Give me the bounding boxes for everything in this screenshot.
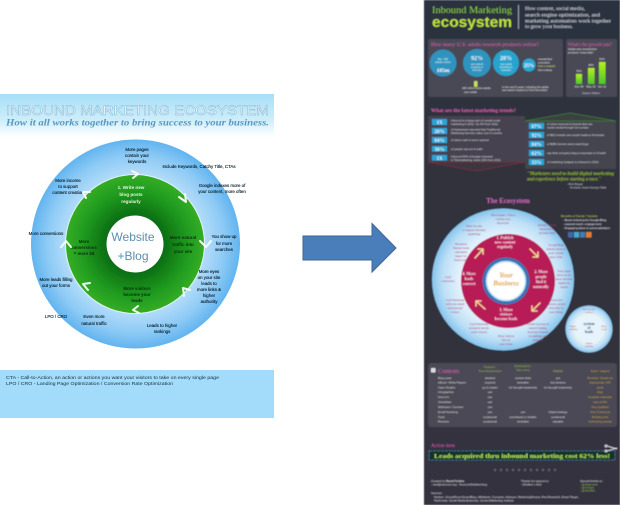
outbound stat rows: of people opt-out of calls bbox=[451, 147, 483, 151]
outer ring labels: More pages bbox=[125, 147, 149, 152]
outer ring labels: more often bbox=[549, 255, 563, 259]
side note: this is likely bbox=[538, 68, 553, 72]
section heading: latest marketing trends: What are the latest marketing trends? bbox=[431, 108, 516, 114]
outer ring labels: viewers, people bbox=[547, 302, 566, 307]
footnotes: use mobile bbox=[464, 90, 478, 94]
inbound stat rows bbox=[529, 122, 606, 166]
footnotes bbox=[462, 85, 549, 94]
funnel of leads disc: More bbox=[601, 325, 608, 328]
outer ring labels: higher in bbox=[559, 281, 570, 285]
footer credits: - Distilled + Moz bbox=[521, 482, 542, 486]
funnel of leads disc: of bbox=[587, 326, 591, 330]
panel: contents comparison table: for thought leadership bbox=[544, 386, 572, 390]
panel: growth chart bbox=[566, 39, 617, 97]
your business center bbox=[486, 262, 526, 300]
table column headers: Nimbly bbox=[553, 369, 563, 373]
panel: contents comparison table: Prioritize: Simple as bbox=[587, 376, 613, 380]
crimson ring labels: leads bbox=[465, 276, 474, 281]
stat circle: 185 million: 185m bbox=[437, 68, 450, 74]
intro text: How content, social media, bbox=[525, 7, 585, 12]
outer ring labels: leads to bbox=[201, 281, 217, 286]
panel: outbound list bbox=[428, 116, 525, 171]
panel: contents comparison table: great bbox=[597, 386, 603, 390]
right title bbox=[432, 5, 513, 31]
outer ring labels: Include Keywords, Catchy Title, CTAs bbox=[162, 164, 236, 169]
outer ring labels: includes links bbox=[539, 231, 556, 235]
panel: contents comparison table: for thought leadership bbox=[509, 386, 537, 390]
green ring labels: 1. Write new bbox=[118, 185, 145, 190]
left bottom definitions band: CTA - Call-to-Action, an action or actions you want your visitors to take on every single page bbox=[6, 375, 219, 380]
side note bbox=[538, 57, 556, 72]
icon: phone bbox=[474, 81, 478, 87]
upward green chevron bbox=[525, 113, 616, 121]
green ring labels bbox=[118, 185, 145, 204]
panel: contents comparison table: few devices bbox=[550, 380, 566, 384]
footer credits bbox=[431, 479, 603, 502]
cycle arrows bbox=[475, 249, 540, 311]
funnel of leads disc: Most people bbox=[583, 308, 596, 311]
outbound stat rows bbox=[432, 118, 502, 162]
icon: social squares bbox=[568, 232, 592, 238]
outer ring labels: Retention bbox=[455, 242, 467, 246]
green ring dark labels: More bbox=[79, 239, 90, 244]
quote: "Marketers need to build digital marketing bbox=[527, 172, 614, 177]
outer ring labels: searches bbox=[215, 247, 234, 252]
inbound stat rows: 62% bbox=[532, 152, 542, 157]
table column headers: Planned / bbox=[484, 365, 496, 369]
funnel of leads disc: connect bbox=[585, 311, 593, 314]
bar chart: 61% bbox=[599, 57, 605, 61]
intro text bbox=[525, 7, 612, 30]
outer blue ring bbox=[31, 140, 240, 348]
table title: Contents bbox=[438, 369, 460, 375]
stat circle: 28%: 28% bbox=[500, 56, 512, 62]
stat circle: 92%: 92% bbox=[471, 56, 483, 62]
inbound stat rows: social media through 1st contact bbox=[547, 126, 589, 130]
table icon bbox=[431, 368, 436, 372]
table rows: Infographics bbox=[438, 390, 454, 394]
panel: contents comparison table: occasional bbox=[551, 415, 565, 419]
right title: ecosystem bbox=[432, 14, 512, 31]
crimson ring labels: 3. More bbox=[499, 307, 513, 312]
crimson ring labels: find it bbox=[536, 279, 547, 284]
stat circle: 92% bbox=[463, 49, 491, 77]
panel: contents comparison table: ratio at 8% bbox=[593, 400, 607, 404]
dark page background bbox=[424, 0, 620, 505]
panel: contents comparison table: linked strategy bbox=[549, 410, 568, 414]
outer ring labels: your content bbox=[548, 251, 564, 255]
panel: contents comparison table: yes bbox=[488, 390, 493, 394]
outer ring labels: More visitors bbox=[498, 334, 515, 338]
inbound stat rows: say their company blog is important to Growth bbox=[547, 151, 606, 155]
table column headers bbox=[479, 364, 610, 373]
outer ring labels: on your site bbox=[198, 275, 221, 280]
outer ring labels: fill out bbox=[502, 338, 510, 342]
outer ring labels: for more bbox=[216, 241, 233, 246]
outer ring labels: to support inbound bbox=[463, 228, 486, 232]
subscribers list callout: - expand reach, engagement bbox=[563, 222, 602, 226]
funnel of leads disc bbox=[566, 306, 612, 352]
white cycle arrows bbox=[61, 171, 211, 313]
callout: leads banner: Leads acquired thru inbound marketing cost 62% less! bbox=[434, 453, 610, 460]
subscribers list callout bbox=[561, 214, 610, 238]
panel: left inbound marketing diagram bbox=[0, 94, 274, 418]
crimson ring labels: new content bbox=[495, 240, 516, 244]
subscribers list callout: Benefits of Social / Youtube bbox=[561, 214, 598, 218]
icon: scissors bbox=[605, 445, 617, 452]
panel: contents comparison table: yes bbox=[488, 395, 493, 399]
green ring dark labels: become your bbox=[123, 292, 151, 297]
bar chart bbox=[575, 57, 607, 88]
outbound stat rows: Marketing has less value over 6 months bbox=[451, 131, 502, 135]
green ring dark labels: More natural bbox=[170, 235, 196, 240]
chart heading: What's the growth rate? bbox=[568, 43, 613, 48]
outer ring labels: Nurture leads bbox=[453, 246, 470, 250]
outer ring labels: Lead bbox=[445, 275, 451, 279]
outbound stat rows: 84% bbox=[434, 139, 444, 144]
green ring dark labels: traffic into bbox=[172, 242, 194, 247]
outer ring labels: contact bbox=[451, 310, 459, 314]
outbound stat rows: 28% bbox=[434, 130, 444, 135]
green ring dark labels: your site bbox=[174, 249, 193, 254]
footnotes: use search engines to find information bbox=[502, 88, 548, 92]
crimson ring labels: 1. Publish bbox=[497, 235, 514, 240]
outer ring labels: Google/Bing bbox=[548, 243, 564, 247]
inbound stat rows: 92% bbox=[532, 134, 542, 139]
outer ring labels: more searches bbox=[555, 277, 573, 281]
green ring dark labels: conversions bbox=[71, 245, 97, 250]
outbound stat rows: marketing in 2012. Up 9% from 2011 bbox=[451, 122, 498, 126]
inbound stat rows: of marketing budgets to inbound in 2012 bbox=[547, 160, 599, 164]
panel: right ecosystem infographic bbox=[424, 0, 620, 505]
table rows: Case Studies bbox=[438, 386, 456, 390]
decorative dot row bbox=[494, 469, 556, 471]
panel: contents comparison table: desirable bbox=[517, 420, 529, 424]
outer ring labels: rankings bbox=[154, 329, 171, 334]
table rows: Checklists bbox=[438, 400, 452, 404]
panel: growth chart: products "externally": bbox=[568, 50, 594, 54]
table column headers: Distribution / bbox=[514, 364, 532, 368]
quote: President, Sensis Strategy Think bbox=[570, 186, 607, 190]
action item heading: Action item bbox=[431, 444, 455, 449]
arrow: blue right arrow bbox=[303, 224, 396, 272]
website blog center circle: +Blog bbox=[117, 249, 149, 263]
panel: contents comparison table: valuable bbox=[553, 420, 564, 424]
ecosystem blue ring bbox=[482, 258, 530, 304]
panel heading: How many U.S. adults research products online? bbox=[431, 43, 540, 48]
title divider bbox=[518, 5, 519, 29]
funnel of leads disc: Higher bbox=[586, 342, 593, 345]
ecosystem crimson ring bbox=[461, 234, 555, 328]
footer credits: Sources: bbox=[431, 491, 443, 495]
outer ring labels: click link on bbox=[548, 306, 564, 310]
outer ring labels: results bbox=[560, 285, 569, 289]
outer ring labels: marketing bbox=[468, 232, 481, 236]
green ring labels: blog posts bbox=[119, 192, 143, 197]
bar chart: May 10 bbox=[586, 84, 596, 88]
outer ring labels: More eyes bbox=[199, 269, 220, 274]
stat circle: 25%: 25% bbox=[524, 64, 534, 69]
outer ring labels: increases domain bbox=[528, 330, 549, 334]
bar chart: Dec 09 bbox=[575, 84, 584, 88]
table rows: Email Nurturing bbox=[438, 410, 458, 414]
footer credits: Thanks for support to: bbox=[521, 479, 549, 483]
outer ring labels: with your email bbox=[446, 302, 465, 306]
table rows: Tools bbox=[438, 415, 445, 419]
footer credits: - @dharmesh bbox=[580, 482, 598, 486]
outer ring labels: LPO / CRO bbox=[45, 314, 68, 319]
panel: contents comparison table: yes bbox=[521, 410, 526, 414]
stat circle: 92%: use search bbox=[471, 62, 484, 66]
outer ring labels bbox=[441, 213, 573, 346]
outbound stat rows: 1X bbox=[436, 121, 443, 126]
funnel of leads disc: visibility bbox=[569, 328, 578, 331]
ecosystem outer disc bbox=[432, 208, 574, 350]
panel: contents comparison table: go-to leader bbox=[482, 386, 498, 390]
website blog center circle bbox=[106, 216, 164, 272]
outer ring labels: Leads to higher bbox=[147, 323, 178, 328]
intro text: search engine optimization, and bbox=[525, 14, 601, 18]
table column headers: Style / shaped bbox=[591, 369, 610, 373]
left header band bbox=[0, 94, 274, 137]
inbound stat rows: of B2C brands use social media to find leads bbox=[547, 133, 605, 137]
panel: contents comparison table: desirable bbox=[517, 380, 529, 384]
outer ring labels: contain your bbox=[125, 153, 149, 158]
subscribers list callout: - Engaging place to personalization bbox=[563, 226, 610, 230]
panel: contents comparison table: content links bbox=[515, 376, 532, 380]
table rows: Webinars / Courses bbox=[438, 405, 464, 409]
your business center: Your bbox=[499, 272, 513, 280]
subscribers list callout: - Boost indexing for Google/Bing bbox=[563, 218, 607, 222]
outbound stat rows: 1X bbox=[436, 157, 443, 162]
bar chart: 36% bbox=[576, 69, 582, 73]
crimson ring labels bbox=[462, 235, 549, 321]
outer ring labels: to support bbox=[58, 184, 79, 189]
outer ring labels: natural linking, bbox=[529, 326, 547, 331]
panel: contents comparison table: Very Trusted as bbox=[590, 410, 611, 414]
outer ring labels: show up for bbox=[557, 273, 571, 277]
quote: - Rick Bragan bbox=[567, 183, 583, 186]
outer ring labels: keywords in bbox=[540, 227, 555, 231]
your business center: Business bbox=[492, 280, 519, 288]
outer ring labels: conversion bbox=[441, 279, 455, 283]
panel: contents comparison table: occasional bbox=[483, 420, 497, 424]
footer credits: - @randfish bbox=[580, 488, 595, 492]
stat circle: 185 million: Est. 195 bbox=[438, 57, 449, 61]
panel: contents comparison table: detailed bbox=[485, 376, 495, 380]
panel: contents comparison table: Appropriate: KPI bbox=[589, 380, 611, 384]
table rows bbox=[438, 376, 467, 424]
panel: contents comparison table: Very qualified bbox=[591, 405, 609, 409]
side note: researched bbox=[538, 57, 552, 61]
footer credits: Special thanks to: bbox=[580, 479, 603, 483]
panel: research online bbox=[428, 39, 563, 97]
green ring labels: regularly bbox=[121, 199, 141, 204]
funnel of leads disc: system bbox=[584, 322, 595, 326]
table rows: eBook / White Papers bbox=[438, 380, 467, 384]
outer ring labels: Lead Nurturing bbox=[470, 322, 489, 326]
panel: contents comparison table bbox=[428, 363, 617, 427]
outer ring labels: your forms bbox=[499, 342, 513, 346]
funnel of leads disc: leads bbox=[601, 328, 607, 331]
funnel of leads disc: Higher bbox=[570, 325, 577, 328]
outer ring labels: More pages / videos bbox=[491, 213, 516, 217]
outer ring labels: higher bbox=[203, 293, 216, 298]
outer ring labels: More leads filling bbox=[40, 277, 73, 282]
footer credits: - @mvolpe bbox=[580, 486, 594, 490]
side note: a product bbox=[538, 60, 550, 64]
left title: INBOUND MARKETING ECOSYSTEM bbox=[6, 103, 269, 119]
stat circle: 92%: find info bbox=[472, 68, 482, 72]
outer ring labels: prospects decide bbox=[469, 326, 490, 330]
panel: contents comparison table: yes bbox=[488, 410, 493, 414]
crimson ring labels: 4. More bbox=[462, 271, 476, 276]
outer ring labels: content creation bbox=[52, 190, 84, 195]
outer ring labels: Include content bbox=[538, 223, 556, 227]
outbound stat rows: Inbound is a large part of overall email bbox=[451, 118, 500, 122]
inbound stat rows: of users respond to brands that use bbox=[547, 122, 593, 126]
stat circle: 92%: engines to bbox=[471, 65, 484, 69]
crimson ring labels: 2. More bbox=[534, 269, 548, 274]
bar chart: Jan 12 bbox=[598, 84, 607, 88]
left bottom definitions band bbox=[0, 370, 274, 418]
outer ring labels: authority bbox=[201, 299, 218, 304]
table column headers: Discovery bbox=[516, 368, 530, 372]
panel: contents comparison table: yes bbox=[556, 376, 561, 380]
stat circle: 28%: networks to bbox=[499, 65, 513, 69]
table rows: Reviews bbox=[438, 420, 449, 424]
outer ring labels: You show up bbox=[212, 234, 237, 239]
outer ring labels: authority bbox=[533, 338, 544, 342]
panel: contents comparison table: required bbox=[485, 380, 496, 384]
inbound stat rows: 33% bbox=[532, 161, 542, 166]
outer ring labels: More income bbox=[55, 178, 81, 183]
funnel of leads disc: visibility bbox=[585, 345, 594, 348]
outer ring labels: customers bbox=[455, 250, 468, 254]
outer ring labels: in rankings and bbox=[529, 334, 548, 338]
panel: contents comparison table: minimizing spread bbox=[588, 420, 612, 424]
outer ring labels: your content, more often bbox=[198, 189, 246, 194]
outer ring labels: Further increase in bbox=[527, 322, 550, 326]
outer ring labels: Google indexes more of bbox=[199, 183, 246, 188]
stat circle: 28%: research bbox=[501, 68, 512, 72]
callout: leads banner bbox=[429, 451, 615, 460]
ecosystem heading: The Ecosystem bbox=[486, 198, 530, 205]
stat circle: 185 million bbox=[430, 50, 456, 76]
stat circle: 28% bbox=[493, 50, 519, 76]
bar chart: 48% bbox=[588, 63, 594, 67]
panel: contents comparison table: template materials bbox=[588, 395, 612, 399]
panel: inbound list bbox=[525, 113, 616, 169]
outer ring labels: More income bbox=[466, 224, 483, 228]
inbound stat rows: 84% bbox=[532, 143, 542, 148]
green ring dark labels: leads bbox=[131, 298, 143, 303]
outbound stat rows: Inbound 44% of budget invested bbox=[451, 154, 493, 158]
outer ring labels: indexes more of bbox=[546, 247, 566, 251]
quote: and experience before starting a race." bbox=[527, 178, 601, 182]
outer ring labels: your listing bbox=[549, 310, 563, 314]
outer ring labels: keywords bbox=[128, 159, 147, 164]
outbound stat rows: in Telemarketing, down 13% from 2011 bbox=[451, 158, 501, 162]
stat circle: 185 million: adults online bbox=[435, 60, 451, 64]
stat circle: 28%: use social bbox=[500, 62, 512, 66]
outer ring labels: out your forms bbox=[42, 283, 71, 288]
outer ring labels: more links & bbox=[197, 287, 221, 292]
green ring dark labels bbox=[71, 235, 196, 303]
downward red chevron bbox=[428, 162, 525, 171]
table column headers: Non-Distribution bbox=[479, 369, 502, 373]
outer ring labels: Reach new bbox=[549, 298, 563, 302]
quote bbox=[527, 172, 614, 190]
footnotes: 180 million active adults bbox=[462, 86, 491, 90]
inbound stat rows: 67% bbox=[532, 125, 542, 130]
crimson ring labels: visitors bbox=[500, 312, 513, 316]
footnotes: In the next 5 years, including the adults bbox=[502, 85, 549, 89]
outer ring labels: future sales bbox=[454, 258, 469, 262]
funnel of leads disc: leads bbox=[585, 330, 594, 334]
outer ring labels: leads convert bbox=[471, 330, 487, 334]
outer ring labels: happy for bbox=[455, 254, 467, 258]
table rows: How to's bbox=[438, 395, 450, 399]
inbound stat rows: of B2B Internet users read blogs bbox=[547, 142, 589, 146]
panel: contents comparison table: purchased or sizable bbox=[510, 415, 537, 419]
intro text: to grow your business. bbox=[525, 25, 573, 30]
side note: from a search bbox=[538, 64, 556, 68]
outer ring labels: Even more bbox=[83, 314, 105, 319]
crimson ring labels: convert bbox=[463, 281, 476, 286]
intro text: marketing automation work together bbox=[525, 20, 612, 24]
footer credits: Created by Rand Fishkin bbox=[431, 479, 464, 483]
crimson ring labels: naturally bbox=[533, 284, 549, 289]
website blog center circle: Website bbox=[111, 230, 155, 244]
outbound stat rows: of direct mail is never opened bbox=[451, 138, 489, 142]
left subtitle: How it all works together to bring success to your business. bbox=[5, 118, 269, 128]
table rows: Blog posts bbox=[438, 376, 452, 380]
panel: growth chart: Adults who researched bbox=[568, 47, 597, 51]
outbound stat rows: 38% bbox=[434, 148, 444, 153]
green ring dark labels: More visitors bbox=[123, 286, 151, 291]
outer ring labels: natural traffic bbox=[81, 321, 107, 326]
crimson ring labels: become leads bbox=[495, 316, 518, 321]
left bottom definitions band: LPO / CRO - Landing Page Optimization / Conversion Rate Optimization bbox=[6, 381, 173, 386]
footer credits: - rand@seomoz.org - Seomoz/Distilled blog bbox=[431, 482, 487, 486]
right title: Inbound Marketing bbox=[432, 5, 513, 15]
crimson ring labels: regularly bbox=[497, 244, 513, 249]
panel: contents comparison table: Building and bbox=[592, 415, 608, 419]
outer ring labels: keywords bbox=[497, 221, 510, 225]
panel: growth chart: Source: Nielsen bbox=[582, 92, 600, 95]
panel: contents comparison table: occasional bbox=[483, 415, 497, 419]
outer ring labels bbox=[29, 147, 246, 334]
panel: contents comparison table: yes bbox=[488, 405, 493, 409]
outer ring labels: and personal bbox=[447, 306, 463, 310]
crimson ring labels: people bbox=[535, 274, 547, 279]
panel: contents comparison table: yes bbox=[488, 400, 493, 404]
footer credits: Technorati, Social Media Examiner, ContentMarketing Institute bbox=[434, 498, 514, 502]
outbound stat rows: of businesses reported that Traditional bbox=[451, 128, 500, 132]
outer ring labels: Your pages bbox=[557, 269, 572, 273]
green ring dark labels: = more $$ bbox=[74, 251, 95, 256]
panel: contents comparison table: blog bbox=[597, 390, 603, 394]
outer ring labels: Lead Nurturing bbox=[446, 298, 465, 302]
green ring bbox=[66, 174, 204, 314]
footer credits: Nielsen, GroupM/comScore/Blog, eMarketer, Compete, Hubspot, MarketingSherpa, Pew Research, Exact Target, bbox=[434, 495, 579, 499]
outer ring labels: contain your bbox=[495, 217, 511, 221]
outer ring labels: More conversions bbox=[29, 231, 64, 236]
